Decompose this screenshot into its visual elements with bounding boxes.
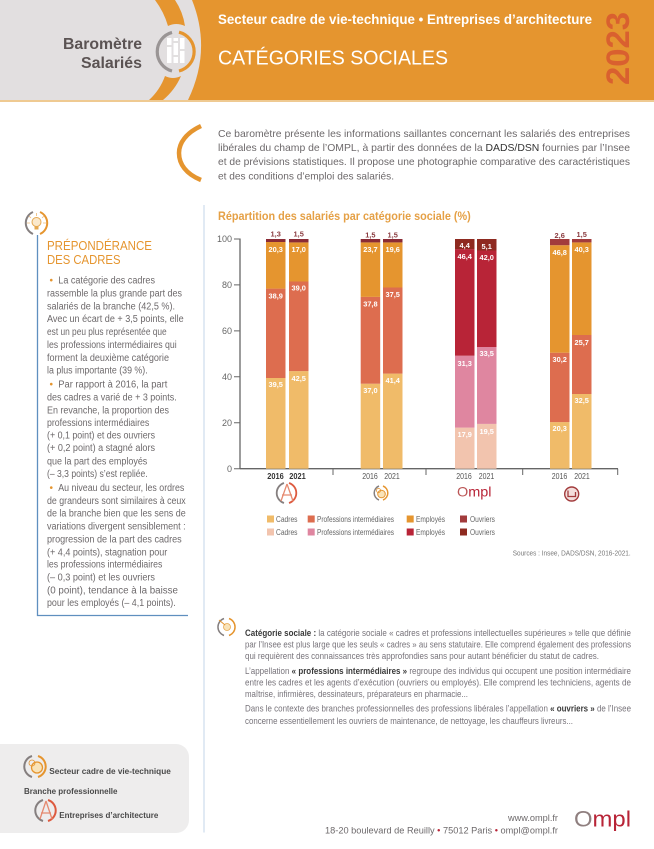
bars: Secteur cadre de vie-technique: 23,7 — [363, 245, 378, 254]
definitions text — [245, 628, 632, 726]
bars: Secteur cadre de vie-technique: 19,6 — [386, 245, 400, 254]
sidebar text: variations divergent sensiblement : — [47, 522, 186, 532]
definitions text: Catégorie sociale : la catégorie sociale « cadres et professions intellectuelles supérieures » telle que définie — [245, 628, 631, 638]
sidebar text: • — [50, 483, 54, 494]
sidebar heading: DES CADRES — [47, 252, 120, 267]
sidebar text — [47, 276, 186, 609]
intro text — [218, 129, 630, 182]
bars: Ompl: 5,1 — [482, 242, 492, 251]
chart heading: Répartition des salariés par catégorie sociale (%) — [218, 209, 471, 223]
legend: Ouvriers — [470, 515, 495, 524]
sidebar text: (– 0,3 point) et les ouvriers — [47, 572, 155, 584]
bars: Ompl: 31,3 — [458, 359, 472, 368]
sidebar heading — [47, 238, 152, 267]
year labels — [267, 471, 590, 481]
bars: Entreprises d'architecture: 39,5 — [269, 380, 283, 389]
bars: Ompl: 19,5 — [480, 427, 494, 436]
sidebar text: Par rapport à 2016, la part — [58, 380, 167, 390]
bars: Branches libérales: 32,5 — [575, 396, 589, 405]
sidebar text: Avec un écart de + 3,5 points, elle — [47, 314, 184, 325]
bars: Ompl — [455, 239, 496, 469]
year labels: 2016 — [267, 471, 284, 481]
legend: Ouvriers — [470, 528, 495, 537]
bars: Ompl: 17,9 — [458, 430, 472, 439]
sidebar text: des cadres a varié de + 3 points. — [47, 392, 177, 404]
logo: Ompl footer: Ompl — [574, 806, 631, 832]
label: Secteur cadre de vie-technique: Secteur cadre de vie-technique — [49, 766, 171, 776]
header label: Baromètre Salariés: Salariés — [81, 55, 142, 72]
legend: Cadres — [276, 528, 298, 537]
bars: Entreprises d'architecture: 1,5 — [294, 230, 304, 238]
intro text: et de prévisions statistiques. Il propose une photographie comparative des caractéristiques — [218, 157, 630, 168]
intro text: Ce baromètre présente les informations saillantes concernant les salariés des entreprises — [218, 129, 630, 140]
sidebar text: les professions intermédiaires qui — [47, 340, 177, 351]
panel: branche professionnelle — [0, 744, 189, 833]
sidebar text: pour les employés (– 4,1 points). — [47, 598, 176, 609]
sidebar text: (+ 4,4 points), stagnation pour — [47, 548, 168, 558]
footer address — [325, 813, 559, 836]
sources: Sources : Insee, DADS/DSN, 2016-2021. — [513, 548, 631, 558]
bars: Entreprises d'architecture: 20,3 — [269, 245, 283, 254]
bars: Branches libérales: 25,7 — [575, 338, 589, 347]
bars: Secteur cadre de vie-technique: 37,0 — [363, 386, 378, 395]
bars: Branches libérales: 2,6 — [555, 231, 565, 240]
bars: Branches libérales: 40,3 — [575, 245, 589, 254]
icon: santé — [565, 487, 579, 501]
sidebar text: (+ 0,1 point) et des ouvriers — [47, 430, 155, 442]
definitions text: concerne essentiellement les ouvriers de maintenance, de nettoyage, les chauffeurs livreurs... — [245, 716, 573, 726]
sidebar text: salariés de la branche (42,5 %). — [47, 302, 175, 312]
legend — [267, 515, 495, 537]
bars: Branches libérales — [550, 230, 592, 469]
chart axes: 80 — [222, 280, 232, 290]
chart axes: 60 — [222, 326, 232, 336]
intro text: libérales du champ de l’OMPL, à partir des données de la DADS/DSN fournies par l’Insee — [218, 143, 630, 154]
sidebar text: (– 3,3 points) s’est repliée. — [47, 469, 148, 480]
icon: architecture — [35, 800, 56, 821]
bars: Entreprises d'architecture: 39,0 — [292, 284, 306, 292]
icon: light bulb — [26, 212, 47, 234]
year labels: 2021 — [574, 471, 590, 481]
legend: Professions intermédiaires — [317, 515, 394, 524]
legend: Employés — [416, 515, 445, 524]
bar chart — [217, 230, 618, 537]
bars: Entreprises d'architecture: 1,3 — [271, 230, 281, 238]
sidebar heading: PRÉPONDÉRANCE — [47, 238, 152, 253]
bars: Secteur cadre de vie-technique: 1,5 — [388, 230, 398, 240]
bars: Branches libérales: 30,2 — [553, 355, 567, 364]
year: 2023 — [600, 12, 636, 85]
sidebar text: que la part des employés — [47, 456, 147, 468]
year labels: 2016 — [552, 471, 567, 481]
sidebar text: rassemble la plus grande part des — [47, 288, 182, 300]
header subtitle: Secteur cadre de vie-technique • Entreprises d’architecture — [218, 11, 592, 27]
icon: cadre de vie — [374, 486, 388, 500]
bars: Secteur cadre de vie-technique: 41,4 — [386, 376, 401, 385]
year labels: 2021 — [384, 471, 400, 481]
header label: Baromètre Salariés: Baromètre — [63, 36, 142, 53]
bars: Branches libérales: 46,8 — [553, 248, 567, 257]
intro bracket — [179, 126, 201, 180]
bars: Secteur cadre de vie-technique: 37,8 — [363, 300, 378, 308]
bars: Ompl: 46,4 — [458, 252, 473, 261]
definitions text: L’appellation « professions intermédiaires » regroupe des individus qui occupent une position intermédiaire — [245, 666, 631, 676]
label: Branche professionnelle: Branche professionnelle — [24, 786, 118, 796]
panel: sidebar prépondérance des cadres — [26, 212, 188, 616]
label: Entreprises d'architecture: Entreprises d’architecture — [59, 810, 159, 820]
sidebar text: progression de la part des cadres — [47, 534, 182, 546]
chart axes: 100 — [217, 234, 232, 244]
icon: barometer — [157, 32, 194, 71]
bars: Ompl: 4,4 — [460, 241, 471, 250]
legend: Cadres — [276, 515, 298, 524]
bars: Ompl: 42,0 — [480, 253, 494, 262]
definitions text: qui requièrent des connaissances très approfondies sans pour autant bénéficier du statut de cadres. — [245, 651, 599, 661]
definitions text: Dans le contexte des branches professionnelles des professions libérales l’appellation « ouvriers » de l’Insee — [245, 704, 631, 714]
sidebar text: de grandeurs sont similaires à ceux — [47, 496, 186, 507]
sidebar text: La catégorie des cadres — [58, 276, 155, 286]
chart axes: 20 — [222, 418, 232, 428]
bars: Branches libérales: 20,3 — [553, 424, 567, 433]
definitions text: maîtrise, infirmières, dessinateurs, préparateurs en pharmacie... — [245, 689, 468, 699]
year labels: 2021 — [289, 471, 306, 481]
bars: Secteur cadre de vie-technique — [361, 230, 402, 469]
chart axes: 40 — [222, 372, 232, 382]
definitions text: entre les cadres et les agents d’exécution (ouvriers ou employés). Elle comprend les techniciens, agents de — [245, 678, 631, 688]
sidebar text: En revanche, la proportion des — [47, 406, 169, 416]
sidebar text: (+ 0,2 point) a stagné alors — [47, 443, 155, 454]
sidebar text: forment la deuxième catégorie — [47, 353, 169, 364]
sidebar text: est un peu plus représentée que — [47, 327, 167, 338]
bars: Secteur cadre de vie-technique: 1,5 — [365, 230, 376, 240]
chart axes — [217, 234, 618, 475]
bars: Branches libérales: 1,5 — [577, 230, 587, 239]
logo: Ompl: Ompl — [457, 484, 492, 500]
bars: Entreprises d'architecture: 42,5 — [292, 374, 306, 383]
title: CATÉGORIES SOCIALES — [218, 46, 448, 70]
year labels: 2021 — [479, 471, 494, 481]
year labels: 2016 — [362, 471, 378, 481]
header label: Baromètre Salariés — [63, 36, 142, 72]
sidebar text: Au niveau du secteur, les ordres — [58, 483, 184, 494]
bars: Ompl: 33,5 — [480, 349, 494, 358]
icon: architecture — [277, 483, 296, 503]
icon: cadre de vie-technique — [24, 756, 46, 777]
footer address: www.ompl.fr — [507, 813, 559, 824]
icon: note — [218, 618, 235, 636]
year labels: 2016 — [456, 471, 472, 481]
sidebar text: • — [50, 380, 54, 390]
intro text: et des conditions d’emploi des salariés. — [218, 172, 394, 182]
bars: Entreprises d'architecture: 38,9 — [269, 292, 283, 300]
footer address: 18-20 boulevard de Reuilly • 75012 Paris • ompl@ompl.fr — [325, 826, 559, 836]
sidebar text: (0 point), tendance à la baisse — [47, 586, 178, 596]
bars: Secteur cadre de vie-technique: 37,5 — [386, 290, 400, 299]
header band — [0, 0, 654, 102]
sidebar text: les professions intermédiaires — [47, 560, 162, 570]
sidebar text: de la branche bien que les sens de — [47, 508, 186, 520]
legend: Employés — [416, 528, 445, 537]
sidebar text: • — [50, 276, 54, 286]
legend: Professions intermédiaires — [317, 528, 394, 537]
sidebar text: la plus importante (39 %). — [47, 366, 148, 376]
chart axes: 0 — [227, 464, 232, 474]
bars: Entreprises d'architecture — [266, 230, 308, 469]
sidebar text: professions intermédiaires — [47, 418, 149, 429]
bars: Entreprises d'architecture: 17,0 — [292, 245, 306, 254]
vertical rule — [203, 205, 205, 832]
